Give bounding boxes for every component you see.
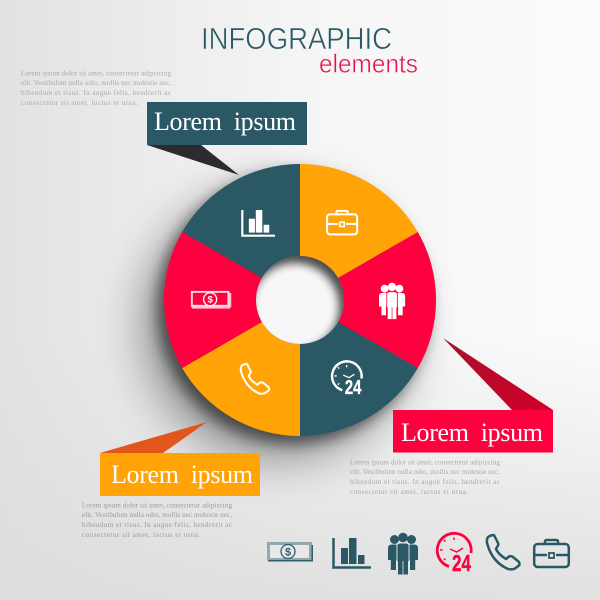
arrow: top tail [147, 145, 239, 175]
text block: under red label: consectetur sit amet, luctus et urna. [350, 488, 468, 496]
pie shadow [144, 172, 429, 458]
text block: under orange label: bibendum et risus. In augue felis, hendrerit ac [82, 521, 232, 529]
box text: Lorem ipsum [154, 107, 296, 136]
icon: clock 24: 24 [452, 550, 471, 576]
centre hole [256, 256, 344, 344]
box [147, 102, 307, 145]
icon: clock 24 [437, 533, 471, 576]
icon: bar chart (pie) [242, 210, 275, 236]
icon: clock 24 (pie): 24 [345, 377, 362, 399]
icon: briefcase (pie) [327, 211, 357, 234]
icon: banknotes (pie): $ [207, 295, 213, 306]
icon: banknotes (pie) [192, 292, 231, 308]
box text: Lorem ipsum [401, 418, 543, 447]
icon: banknotes: $ [285, 546, 291, 558]
text block: top left: Lorem ipsum dolor sit amet, consectetur adipiscing [21, 70, 172, 78]
label: orange [100, 422, 260, 496]
arrow: red tail [443, 338, 553, 410]
box [393, 410, 553, 452]
text block: top left: bibendum et risus. In augue felis, hendrerit ac [21, 89, 171, 97]
segment: orange bottom left [182, 322, 300, 436]
icon: people (pie) [379, 283, 405, 319]
text block: top left: consectetur sit amet, luctus et urna. [21, 99, 138, 107]
text block: under orange label: Lorem ipsum dolor sit amet, consectetur adipiscing [82, 502, 232, 510]
text block: under red label: Lorem ipsum dolor sit amet, consectetur adipiscing [350, 458, 500, 466]
label: top [147, 102, 307, 175]
icon: briefcase [534, 540, 569, 567]
text block: top left [21, 70, 172, 107]
icon: phone (pie) [241, 364, 269, 394]
icon: clock 24 (pie) [332, 361, 362, 399]
text block: under red label [350, 458, 500, 496]
title [201, 21, 418, 78]
segment: red right [338, 232, 436, 368]
text block: under red label: bibendum et risus. In augue felis, hendrerit ac [350, 478, 500, 486]
text block: under orange label [82, 502, 232, 539]
title: INFOGRAPHIC [201, 21, 392, 56]
donut chart [164, 164, 436, 436]
icon: phone [487, 535, 520, 569]
segment: teal top left [182, 164, 300, 278]
box text: Lorem ipsum [111, 460, 253, 489]
segment: teal bottom right [300, 322, 418, 436]
text block: under red label: elit. Vestibulum nulla odio, mollis nec molestie nec, [350, 468, 500, 476]
icon: bar chart [334, 538, 371, 568]
title: elements [319, 48, 418, 78]
icon: banknotes [267, 542, 313, 562]
segment: red left [164, 232, 262, 368]
label: red [393, 338, 553, 452]
text block: top left: elit. Vestibulum nulla odio, mollis nec molestie nec, [21, 79, 171, 87]
segment: orange top right [300, 164, 418, 278]
text block: under orange label: elit. Vestibulum nulla odio, mollis nec molestie nec, [82, 511, 232, 519]
icon: people [388, 533, 418, 574]
arrow: orange tail [100, 422, 207, 453]
text block: under orange label: consectetur sit amet, luctus et urna. [82, 531, 200, 539]
icon row [267, 533, 569, 576]
box [100, 453, 260, 496]
